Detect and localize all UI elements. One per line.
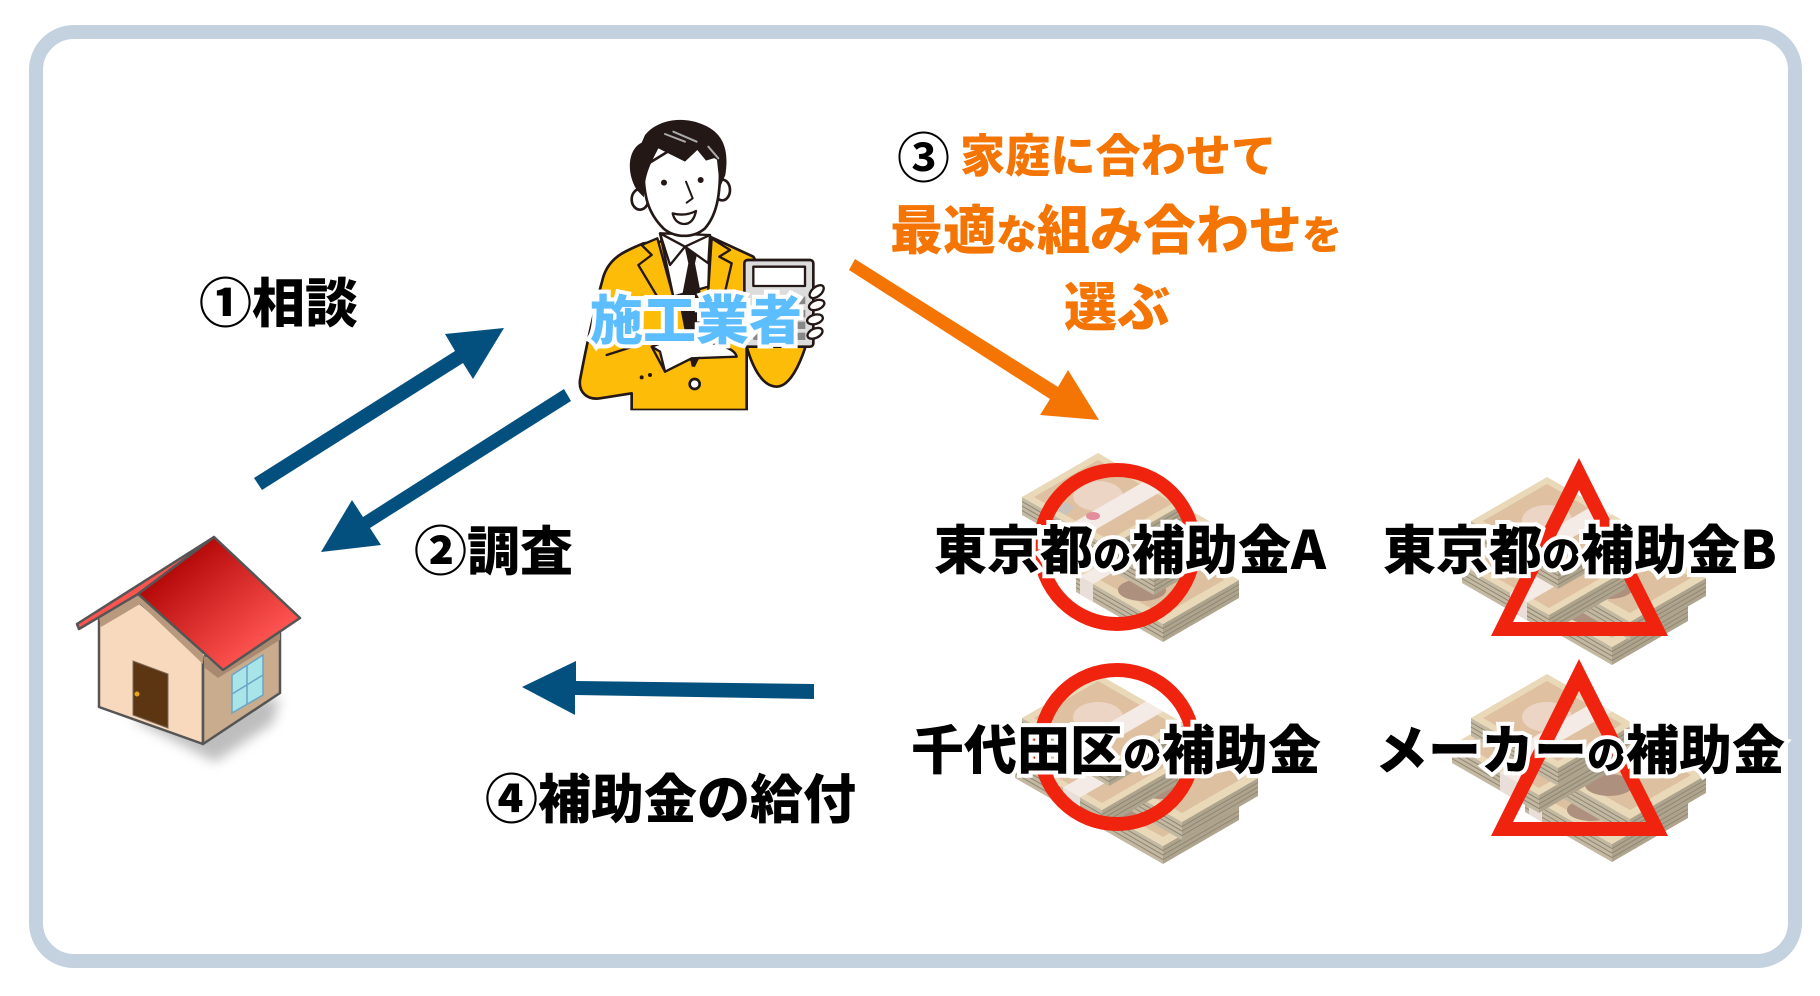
icon: red triangle D [1491, 659, 1668, 836]
icon: businessman [580, 120, 826, 415]
arrow: consultation [254, 328, 504, 490]
icon: money stack B [1462, 477, 1706, 665]
heading: step 3 [890, 117, 1342, 342]
heading: step 2: ②調査 [414, 510, 573, 586]
icon: money stack D [1452, 674, 1706, 862]
icon: money stack C [1015, 674, 1258, 864]
arrow: payment [522, 661, 814, 715]
icon: house [77, 537, 300, 762]
icon: red triangle B [1491, 458, 1668, 636]
icon: red circle A [1040, 470, 1194, 624]
heading: step 3: 選ぶ [1064, 266, 1170, 342]
arrow: survey [321, 389, 571, 552]
label: Chiyoda subsidy: 千代田区の補助金 [911, 709, 1321, 785]
label: Tokyo subsidy A: 東京都の補助金A [934, 509, 1327, 585]
arrow: orange selection [849, 259, 1099, 420]
icon: red circle C [1040, 670, 1194, 824]
heading: step 4: ④補助金の給付 [485, 758, 856, 834]
icon: money stack A [1022, 453, 1239, 642]
label: contractor: 施工業者 [590, 279, 802, 355]
label: Tokyo subsidy B: 東京都の補助金B [1383, 509, 1777, 585]
heading: step 3: 最適な組み合わせを [890, 189, 1342, 265]
label: manufacturer subsidy: メーカーの補助金 [1375, 709, 1785, 785]
heading: step 3: 家庭に合わせて [960, 121, 1276, 186]
heading: step 1: ①相談 [199, 262, 358, 338]
heading: step 3: ③ [897, 117, 950, 193]
